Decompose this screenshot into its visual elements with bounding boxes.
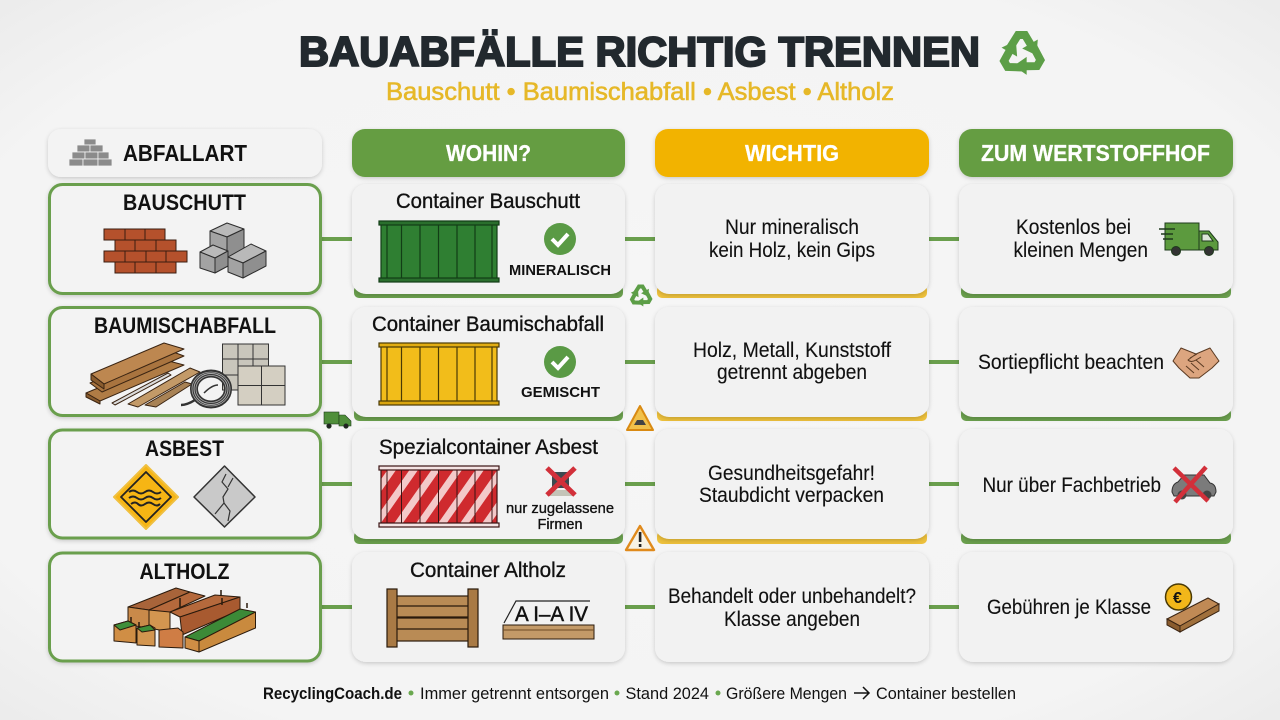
row 3: Wohin card: nur zugelassene: [506, 500, 614, 517]
row 2: Wohin card: Container Baumischabfall: [372, 313, 604, 336]
footer: Container bestellen: [876, 684, 1016, 703]
title: BAUABFÄLLE RICHTIG TRENNEN: [299, 28, 980, 75]
header: Zum Wertstoffhof: [959, 129, 1233, 177]
row 2: Wohin card: [352, 307, 625, 421]
icon: delivery truck: [1159, 223, 1218, 256]
row 3: Wichtig card: Gesundheitsgefahr!: [708, 462, 875, 485]
icon: small truck: [324, 412, 351, 428]
icon: brick wall: [104, 229, 187, 273]
row 4: Wertstoffhof card: Gebühren je Klasse: [987, 596, 1151, 619]
icon: check mark: [544, 223, 576, 255]
row 2: Wohin card: GEMISCHT: [521, 384, 600, 401]
icon: cable coil: [181, 371, 231, 407]
row 3: Wohin card: Spezialcontainer Asbest: [379, 436, 598, 459]
row 4: Wertstoffhof card: [959, 552, 1233, 662]
footer: RecyclingCoach.de: [263, 684, 402, 703]
icon: hazard striped container: [379, 466, 499, 527]
row 3: Wohin card: [352, 429, 625, 544]
row 1: Wichtig card: [655, 184, 929, 298]
icon: recycling symbol: [998, 35, 1045, 77]
header: Abfallart: [48, 129, 322, 177]
header: Wichtig: [655, 129, 929, 177]
row 3: Asbest type panel: [50, 430, 320, 538]
header: Zum Wertstoffhof: ZUM WERTSTOFFHOF: [981, 140, 1210, 166]
icon: crossed-out car: [1172, 467, 1216, 502]
row 2: Baumischabfall type panel: BAUMISCHABFALL: [94, 313, 276, 338]
icon: small recycling symbol: [629, 286, 653, 308]
row 3: Wertstoffhof card: [959, 429, 1233, 544]
icon: stacked old timber: [114, 588, 256, 652]
header: Abfallart: ABFALLART: [123, 140, 247, 166]
icon: crossed-out truck: [547, 468, 575, 496]
row 4: Altholz type panel: [50, 553, 320, 661]
row 2: Wertstoffhof card: [959, 307, 1233, 421]
icon: cracked tile: [194, 466, 255, 527]
row 2: Baumischabfall type panel: [50, 308, 320, 416]
icon: small warning sign: [627, 406, 653, 430]
icon: check mark: [544, 346, 576, 378]
footer: [263, 684, 1016, 703]
row 2: Wertstoffhof card: Sortiepflicht beachten: [978, 351, 1164, 374]
header: Wichtig: WICHTIG: [745, 140, 839, 166]
row 2: Wichtig card: Holz, Metall, Kunststoff: [693, 339, 891, 362]
row 1: Wichtig card: kein Holz, kein Gips: [709, 239, 875, 262]
row 1: Bauschutt type panel: BAUSCHUTT: [123, 190, 246, 215]
row 4: Altholz type panel: ALTHOLZ: [140, 559, 230, 584]
header: Wohin: [352, 129, 625, 177]
row 4: Wohin card: Container Altholz: [410, 559, 566, 582]
icon: handshake: [1173, 348, 1219, 378]
row 3: Asbest type panel: ASBEST: [145, 436, 224, 461]
icon: wooden boards: [86, 343, 200, 407]
icon: tiles: [222, 344, 285, 405]
icon: yellow container: [379, 343, 499, 405]
icon: euro coin and plank: €: [1173, 590, 1182, 607]
footer: Immer getrennt entsorgen: [420, 684, 609, 703]
row 1: Wohin card: [352, 184, 625, 298]
row 2: Wichtig card: getrennt abgeben: [717, 361, 867, 384]
icon: wood class sign A I–A IV: [503, 601, 594, 639]
row 3: Wertstoffhof card: Nur über Fachbetrieb: [982, 474, 1161, 497]
icon: wooden crate: [387, 589, 478, 647]
row 1: Wertstoffhof card: [959, 184, 1233, 298]
footer: Größere Mengen: [726, 684, 847, 703]
icon: concrete blocks: [200, 223, 266, 278]
icon: euro coin and plank: [1166, 584, 1219, 632]
row 2: Wichtig card: [655, 307, 929, 421]
row 3: Wichtig card: Staubdicht verpacken: [699, 484, 884, 507]
row 1: Wohin card: Container Bauschutt: [396, 190, 580, 213]
subtitle: Bauschutt • Baumischabfall • Asbest • Altholz: [386, 78, 894, 106]
icon: brick pile: [69, 139, 112, 166]
row 3: Wohin card: Firmen: [538, 516, 582, 533]
row 4: Wichtig card: [655, 552, 929, 662]
icon: green container: [379, 221, 499, 282]
row 1: Bauschutt type panel: [50, 184, 320, 294]
icon: warning triangle: [626, 526, 654, 550]
row 1: Wertstoffhof card: Kostenlos bei: [1016, 216, 1131, 239]
connector lines: [322, 237, 959, 609]
row 4: Wichtig card: Klasse angeben: [724, 608, 860, 631]
row 1: Wichtig card: Nur mineralisch: [725, 216, 859, 239]
footer: Stand 2024: [626, 684, 709, 703]
icon: asbestos warning diamond: [114, 465, 178, 529]
icon: wood class sign A I–A IV: A I–A IV: [515, 603, 588, 626]
row 4: Wohin card: [352, 552, 625, 662]
row 1: Wohin card: MINERALISCH: [509, 262, 611, 279]
header: Wohin: WOHIN?: [446, 140, 531, 166]
row 4: Wichtig card: Behandelt oder unbehandelt?: [668, 585, 916, 608]
row 3: Wichtig card: [655, 429, 929, 544]
row 1: Wertstoffhof card: kleinen Mengen: [1014, 239, 1148, 262]
